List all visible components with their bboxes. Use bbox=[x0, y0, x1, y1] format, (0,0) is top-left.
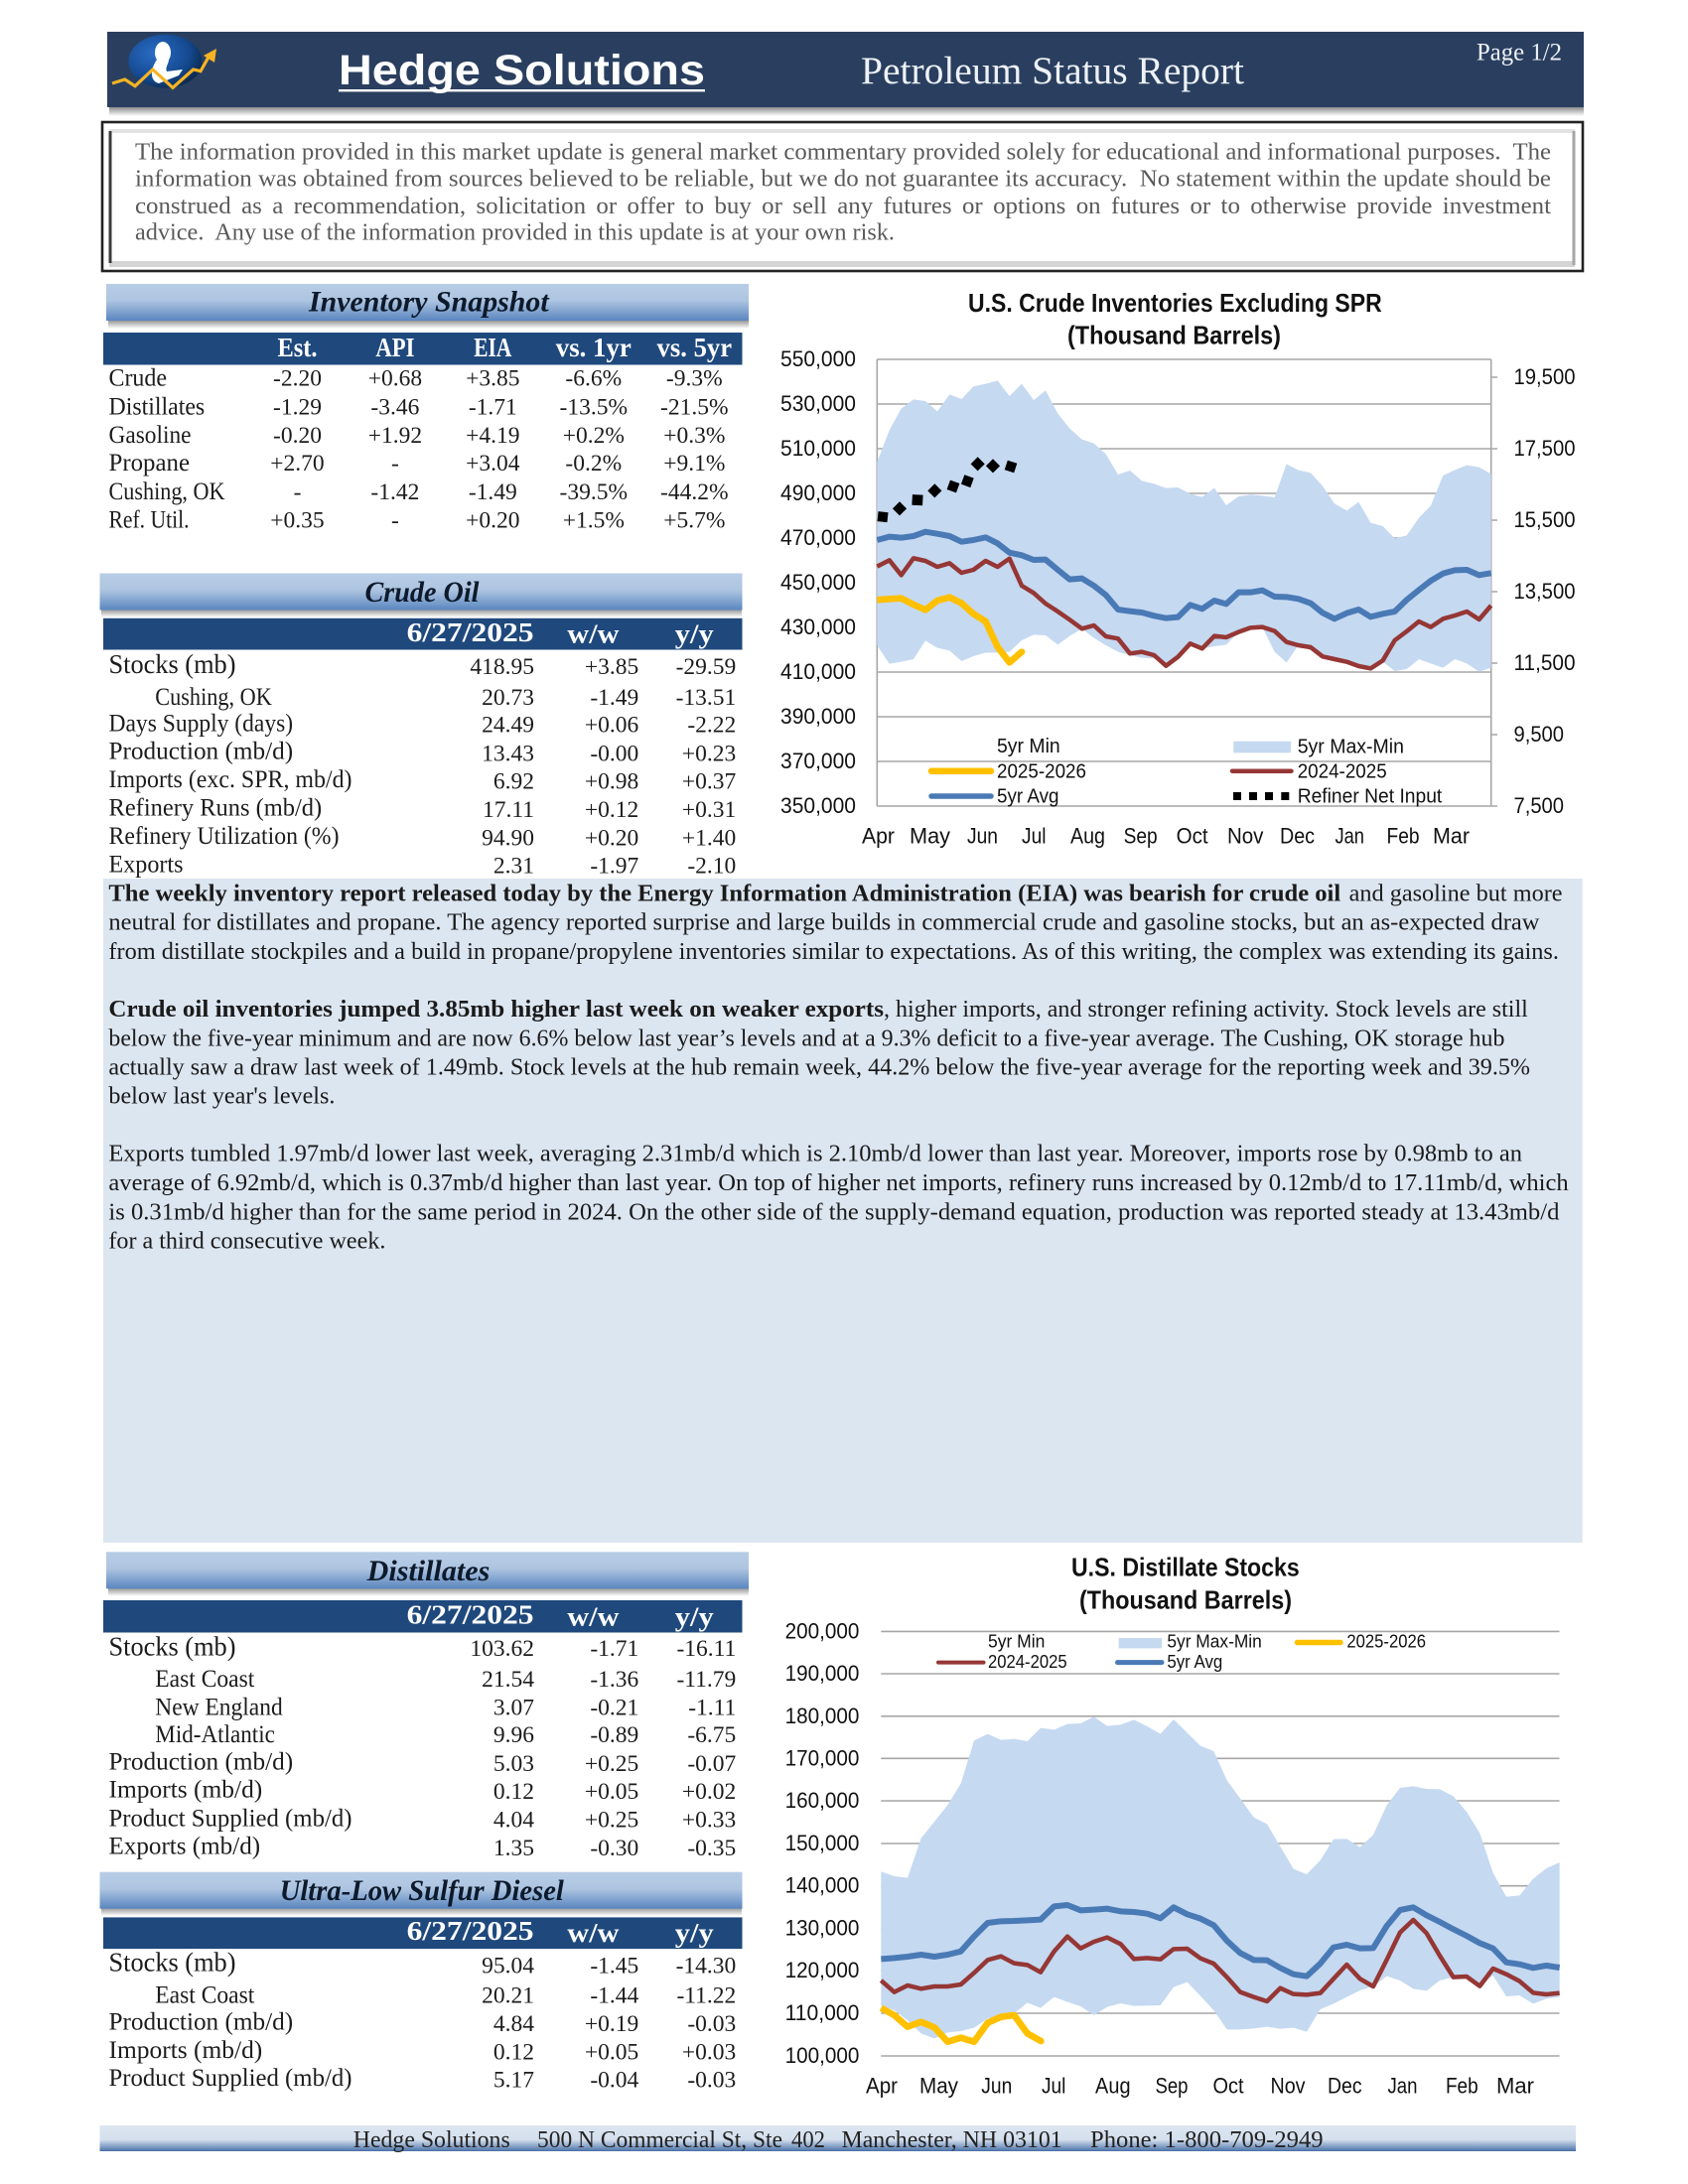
commentary paragraph 3: average of 6.92mb/d, which is 0.37mb/d higher than last year. On top of higher net imports, refinery runs increased by 0.12mb/d to 17.11mb/d, which bbox=[108, 1170, 1569, 1196]
data series bbox=[877, 380, 1491, 672]
table rows: Mid-Atlantic bbox=[155, 1721, 275, 1748]
chart legend: 2025-2026 bbox=[1346, 1632, 1426, 1652]
table rows: -1.44 bbox=[590, 1983, 639, 2009]
month labels: Feb bbox=[1386, 824, 1420, 848]
table rows: - bbox=[391, 451, 399, 477]
footer contact text: Phone: 1-800-709-2949 bbox=[1090, 2127, 1324, 2153]
y axis labels: 130,000 bbox=[785, 1915, 859, 1940]
table rows: 20.21 bbox=[482, 1983, 534, 2009]
table rows: -2.22 bbox=[687, 713, 736, 739]
y axis labels: 200,000 bbox=[785, 1618, 859, 1643]
table rows: +0.3% bbox=[663, 423, 725, 449]
table rows: +1.40 bbox=[682, 825, 736, 851]
footer bar bbox=[99, 2125, 1576, 2153]
heading: Inventory Snapshot: Inventory Snapshot bbox=[308, 286, 550, 319]
table rows: -0.07 bbox=[687, 1751, 737, 1777]
left axis labels: 530,000 bbox=[780, 391, 856, 416]
table rows: 94.90 bbox=[482, 825, 534, 851]
table rows: +0.06 bbox=[585, 713, 639, 739]
table rows: +2.70 bbox=[270, 451, 325, 477]
table rows: +0.20 bbox=[466, 508, 519, 534]
table rows bbox=[109, 365, 729, 534]
month labels: May bbox=[910, 824, 950, 848]
y axis labels: 170,000 bbox=[785, 1745, 859, 1770]
left axis labels: 490,000 bbox=[780, 480, 856, 505]
table rows: -1.71 bbox=[590, 1636, 638, 1662]
table rows: Product Supplied (mb/d) bbox=[109, 1806, 352, 1833]
table rows: +0.05 bbox=[585, 1779, 638, 1805]
chart legend: 5yr Max-Min bbox=[1167, 1632, 1262, 1652]
table rows: 0.12 bbox=[493, 2039, 534, 2065]
table rows: -29.59 bbox=[676, 654, 736, 680]
table rows: +1.92 bbox=[368, 423, 422, 449]
right axis labels bbox=[1513, 364, 1575, 818]
month labels: Apr bbox=[866, 2073, 898, 2099]
month labels: Jun bbox=[981, 2073, 1012, 2099]
month labels: Nov bbox=[1271, 2073, 1305, 2099]
month labels: Apr bbox=[862, 824, 895, 848]
table rows: +0.35 bbox=[270, 508, 325, 534]
panel: inventory snapshot bbox=[103, 284, 749, 534]
month labels: Aug bbox=[1070, 824, 1105, 848]
table rows bbox=[109, 649, 737, 879]
month labels: Dec bbox=[1328, 2073, 1362, 2099]
chart legend: 2025-2026 bbox=[997, 760, 1086, 782]
table header row bbox=[103, 1600, 743, 1632]
month labels: Feb bbox=[1446, 2073, 1478, 2099]
2024-2025 line bbox=[881, 1920, 1560, 2001]
chart legend: 5yr Avg bbox=[997, 785, 1058, 807]
table rows: +0.31 bbox=[682, 797, 736, 823]
table rows: 21.54 bbox=[482, 1667, 534, 1693]
table rows: +0.03 bbox=[682, 2039, 736, 2065]
table rows: -2.10 bbox=[687, 853, 736, 879]
heading: Distillates: Distillates bbox=[366, 1555, 490, 1587]
left axis labels: 370,000 bbox=[780, 749, 856, 773]
table rows: -0.21 bbox=[590, 1695, 638, 1720]
chart legend: 2024-2025 bbox=[988, 1652, 1067, 1672]
right axis labels: 17,500 bbox=[1513, 436, 1575, 461]
table rows: -1.97 bbox=[590, 853, 639, 879]
month labels: Dec bbox=[1280, 824, 1315, 848]
table rows: -0.2% bbox=[565, 451, 622, 477]
month labels bbox=[866, 2073, 1534, 2099]
table rows: +0.37 bbox=[682, 768, 737, 794]
heading: Ultra-Low Sulfur Diesel: Ultra-Low Sulfur Diesel bbox=[280, 1874, 565, 1907]
month labels: Sep bbox=[1156, 2073, 1188, 2099]
disclaimer text bbox=[135, 140, 1551, 246]
left axis labels: 550,000 bbox=[780, 346, 856, 371]
disclaimer text: information was obtained from sources believed to be reliable, but we do not guarantee its accuracy. No statement within the update should be bbox=[135, 167, 1551, 193]
y axis labels: 140,000 bbox=[785, 1873, 859, 1898]
right axis labels: 13,500 bbox=[1513, 579, 1575, 604]
5yr average line bbox=[877, 532, 1491, 618]
table rows: -21.5% bbox=[660, 395, 729, 421]
table header row: API bbox=[375, 333, 414, 362]
month labels: Jan bbox=[1335, 824, 1364, 848]
table header row: vs. 5yr bbox=[657, 333, 732, 362]
table rows: Stocks (mb) bbox=[109, 1948, 236, 1978]
table rows: +5.7% bbox=[663, 508, 725, 534]
month labels: Oct bbox=[1213, 2073, 1243, 2099]
table rows: Refinery Runs (mb/d) bbox=[109, 795, 322, 822]
table rows: - bbox=[391, 508, 399, 534]
table rows: -6.75 bbox=[687, 1722, 736, 1748]
table rows: Imports (mb/d) bbox=[109, 2037, 262, 2064]
chart: U.S. distillate stocks bbox=[785, 1553, 1560, 2099]
table rows: East Coast bbox=[155, 1982, 254, 2009]
table rows: +0.68 bbox=[368, 366, 422, 392]
table rows: Stocks (mb) bbox=[109, 1631, 236, 1661]
table rows: Crude bbox=[109, 365, 167, 392]
heading: Crude Oil bbox=[99, 574, 743, 617]
table rows: -13.5% bbox=[560, 395, 628, 421]
footer contact text: Hedge Solutions bbox=[353, 2127, 510, 2153]
chart legend: 2024-2025 bbox=[1298, 760, 1387, 782]
right axis labels: 9,500 bbox=[1513, 722, 1564, 747]
5yr max-min band bbox=[877, 380, 1491, 672]
table rows: Distillates bbox=[109, 394, 205, 421]
month labels: Jan bbox=[1388, 2073, 1418, 2099]
commentary paragraph 3: is 0.31mb/d higher than for the same period in 2024. On the other side of the supply-demand equation, production was reported steady at 13.43mb/d bbox=[108, 1199, 1559, 1225]
table rows: -0.00 bbox=[590, 741, 638, 766]
table rows bbox=[109, 1631, 737, 1861]
table rows: +0.19 bbox=[585, 2011, 638, 2037]
chart: U.S. crude inventories excluding SPR bbox=[780, 288, 1575, 848]
table rows: 24.49 bbox=[482, 713, 534, 739]
month labels: Jul bbox=[1022, 824, 1047, 848]
month labels: Jun bbox=[967, 824, 998, 848]
table rows: +3.85 bbox=[585, 654, 638, 680]
table header row bbox=[103, 1916, 743, 1949]
table rows: -1.11 bbox=[688, 1695, 736, 1720]
table rows: -0.03 bbox=[687, 2011, 736, 2037]
table rows: +9.1% bbox=[663, 451, 725, 477]
y axis labels: 190,000 bbox=[785, 1661, 859, 1686]
chart legend bbox=[938, 1632, 1426, 1672]
table rows: +0.20 bbox=[585, 825, 638, 851]
table header row: 6/27/2025 bbox=[407, 617, 534, 647]
table rows bbox=[109, 1948, 736, 2093]
commentary paragraph 1: neutral for distillates and propane. The agency reported surprise and large builds in commercial crude and gasoline stocks, but an as-expected draw bbox=[108, 910, 1540, 936]
left axis labels: 510,000 bbox=[780, 436, 856, 461]
table header row: w/w bbox=[567, 619, 620, 649]
table rows: -1.29 bbox=[273, 395, 322, 421]
month labels: Mar bbox=[1433, 824, 1470, 848]
footer contact text: 402 bbox=[791, 2127, 825, 2153]
table rows: Gasoline bbox=[109, 422, 191, 449]
table rows: 103.62 bbox=[470, 1636, 534, 1662]
panel: distillates bbox=[103, 1552, 749, 1861]
table header row: w/w bbox=[567, 1918, 620, 1948]
chart legend: 5yr Min bbox=[988, 1632, 1045, 1652]
table rows: Cushing, OK bbox=[109, 478, 224, 505]
left axis labels: 390,000 bbox=[780, 704, 856, 729]
table rows: -16.11 bbox=[676, 1636, 736, 1662]
y axis labels: 100,000 bbox=[785, 2043, 859, 2068]
left axis labels bbox=[780, 346, 856, 818]
table header row: Est. bbox=[278, 333, 318, 362]
right axis labels: 7,500 bbox=[1513, 793, 1564, 818]
footer contact text: 500 N Commercial St, Ste bbox=[537, 2127, 782, 2153]
table rows: +0.05 bbox=[585, 2039, 638, 2065]
table rows: -11.22 bbox=[676, 1983, 736, 2009]
panel: crude oil bbox=[99, 574, 743, 879]
table rows: +0.33 bbox=[682, 1807, 736, 1833]
table rows: -1.36 bbox=[590, 1667, 639, 1693]
page number: Page 1/2 bbox=[1477, 40, 1562, 66]
table rows: +3.85 bbox=[466, 366, 519, 392]
disclaimer text: The information provided in this market update is general market commentary provided solely for educational and informational purposes. The bbox=[135, 140, 1551, 166]
table rows: -1.49 bbox=[469, 479, 517, 505]
table rows: +0.98 bbox=[585, 768, 638, 794]
table rows: -6.6% bbox=[565, 366, 622, 392]
table rows: Imports (mb/d) bbox=[109, 1777, 262, 1804]
2024-2025 line bbox=[877, 558, 1491, 668]
5yr max-min band bbox=[881, 1716, 1560, 2038]
table rows: +0.23 bbox=[682, 741, 736, 766]
5yr average line bbox=[881, 1905, 1560, 1977]
table rows: +4.19 bbox=[466, 423, 519, 449]
table header row: vs. 1yr bbox=[556, 333, 632, 362]
commentary paragraph 1 bbox=[108, 881, 1563, 965]
table rows: Ref. Util. bbox=[109, 506, 189, 534]
chart legend: 5yr Min bbox=[997, 736, 1060, 757]
table header row: 6/27/2025 bbox=[407, 1916, 534, 1946]
table rows: -2.20 bbox=[273, 366, 322, 392]
chart legend: Refiner Net Input bbox=[1298, 785, 1443, 807]
table rows: -9.3% bbox=[666, 366, 723, 392]
table rows: East Coast bbox=[155, 1666, 254, 1693]
table rows: 17.11 bbox=[483, 797, 534, 823]
table rows: +0.25 bbox=[585, 1807, 638, 1833]
left axis labels: 470,000 bbox=[780, 525, 856, 550]
commentary panel bbox=[103, 879, 1583, 1543]
footer contact text bbox=[353, 2127, 1324, 2153]
subtitle: Petroleum Status Report: Petroleum Status Report bbox=[861, 50, 1244, 92]
table rows: 95.04 bbox=[482, 1953, 534, 1979]
title: Hedge Solutions: Hedge Solutions bbox=[339, 47, 705, 94]
gridlines bbox=[881, 1631, 1559, 2056]
heading: Distillates bbox=[106, 1552, 749, 1596]
plot frame and gridlines bbox=[877, 359, 1497, 806]
commentary paragraph 1: from distillate stockpiles and a build in propane/propylene inventories similar to expectations. As of this writing, the complex was extending its gains. bbox=[108, 939, 1559, 965]
month labels: Aug bbox=[1095, 2073, 1131, 2099]
table rows: Exports (mb/d) bbox=[109, 1833, 260, 1859]
chart title: (Thousand Barrels) bbox=[1067, 320, 1281, 349]
chart title bbox=[968, 288, 1382, 349]
right axis labels: 15,500 bbox=[1513, 507, 1575, 532]
commentary paragraph 2: actually saw a draw last week of 1.49mb. Stock levels at the hub remain week, 44.2% below the five-year average for the reporting week and 39.5% bbox=[108, 1054, 1530, 1080]
table rows: 3.07 bbox=[493, 1695, 534, 1720]
table rows: +0.25 bbox=[585, 1751, 638, 1777]
month labels: Nov bbox=[1227, 824, 1263, 848]
page header banner bbox=[107, 32, 1584, 116]
table rows: +3.04 bbox=[466, 451, 520, 477]
table rows: -11.79 bbox=[676, 1667, 736, 1693]
table rows: Product Supplied (mb/d) bbox=[109, 2065, 352, 2092]
panel: ultra-low sulfur diesel bbox=[99, 1872, 743, 2093]
table rows: +0.2% bbox=[563, 423, 625, 449]
table rows: +0.12 bbox=[585, 797, 638, 823]
chart legend: 5yr Max-Min bbox=[1298, 736, 1404, 757]
table rows: -39.5% bbox=[560, 479, 628, 505]
table rows: - bbox=[294, 479, 301, 505]
month labels: Oct bbox=[1177, 824, 1208, 848]
table rows: Days Supply (days) bbox=[109, 711, 293, 738]
commentary paragraph 1: The weekly inventory report released today by the Energy Information Administration (EIA) was bearish for crude oil bbox=[108, 881, 1341, 906]
2025-2026 line bbox=[877, 598, 1025, 662]
table rows: -3.46 bbox=[370, 395, 420, 421]
table rows: -0.30 bbox=[590, 1836, 638, 1861]
table rows: 4.84 bbox=[493, 2011, 534, 2037]
table rows: 9.96 bbox=[493, 1722, 534, 1748]
table rows: -13.51 bbox=[676, 685, 736, 711]
table header row: 6/27/2025 bbox=[407, 1600, 534, 1630]
table rows: -44.2% bbox=[660, 479, 729, 505]
y axis labels: 160,000 bbox=[785, 1788, 859, 1813]
table rows: Production (mb/d) bbox=[109, 738, 293, 764]
table rows: -1.49 bbox=[590, 685, 638, 711]
left axis labels: 410,000 bbox=[780, 659, 856, 684]
2025-2026 line bbox=[881, 2008, 1045, 2044]
commentary paragraph 3 bbox=[108, 1141, 1569, 1254]
y axis labels: 110,000 bbox=[785, 2000, 859, 2025]
left axis labels: 350,000 bbox=[780, 793, 856, 818]
table header row bbox=[103, 617, 743, 649]
table header row: y/y bbox=[675, 1602, 714, 1632]
month labels: Sep bbox=[1124, 824, 1158, 848]
table rows: Imports (exc. SPR, mb/d) bbox=[109, 766, 352, 793]
table rows: Exports bbox=[109, 851, 183, 878]
month labels: Mar bbox=[1496, 2073, 1534, 2099]
footer contact text: Manchester, NH 03101 bbox=[842, 2127, 1062, 2153]
chart legend: 5yr Avg bbox=[1167, 1652, 1222, 1672]
commentary paragraph 3: Exports tumbled 1.97mb/d lower last week, averaging 2.31mb/d which is 2.10mb/d lower than last year. Moreover, imports rose by 0.98mb to an bbox=[108, 1141, 1522, 1166]
table rows: Propane bbox=[109, 450, 190, 477]
table rows: Cushing, OK bbox=[155, 684, 272, 711]
table rows: 4.04 bbox=[493, 1807, 534, 1833]
chart title: U.S. Crude Inventories Excluding SPR bbox=[968, 288, 1382, 318]
left axis labels: 450,000 bbox=[780, 570, 856, 595]
table rows: -1.42 bbox=[370, 479, 419, 505]
table rows: -0.04 bbox=[590, 2067, 639, 2093]
data series bbox=[881, 1716, 1560, 2044]
chart title bbox=[1071, 1553, 1300, 1614]
table rows: 13.43 bbox=[482, 741, 534, 766]
table rows: -14.30 bbox=[676, 1953, 736, 1979]
table rows: 20.73 bbox=[482, 685, 534, 711]
commentary paragraph 1: and gasoline but more bbox=[1349, 881, 1563, 906]
table rows: -1.45 bbox=[590, 1953, 638, 1979]
chart title: U.S. Distillate Stocks bbox=[1071, 1553, 1300, 1582]
month labels bbox=[862, 824, 1470, 848]
table rows: Stocks (mb) bbox=[109, 649, 236, 679]
disclaimer text: advice. Any use of the information provided in this update is at your own risk. bbox=[135, 220, 895, 246]
table rows: -0.03 bbox=[687, 2067, 736, 2093]
table rows: Production (mb/d) bbox=[109, 2009, 293, 2035]
commentary paragraph 2 bbox=[108, 997, 1530, 1110]
table rows: 0.12 bbox=[493, 1779, 534, 1805]
disclaimer text: construed as a recommendation, solicitation or offer to buy or sell any futures or options on futures or to otherwise provide investment bbox=[135, 194, 1551, 219]
right axis labels: 11,500 bbox=[1513, 650, 1575, 675]
table header row: y/y bbox=[675, 619, 714, 649]
commentary paragraph 2: below last year's levels. bbox=[108, 1084, 335, 1110]
disclaimer box bbox=[102, 122, 1583, 271]
table rows: -0.20 bbox=[273, 423, 322, 449]
table rows: 5.03 bbox=[493, 1751, 534, 1777]
table rows: -1.71 bbox=[469, 395, 517, 421]
icon: Hedge Solutions logo bbox=[112, 35, 216, 88]
table rows: +0.02 bbox=[682, 1779, 736, 1805]
table rows: 418.95 bbox=[470, 654, 534, 680]
refiner net input markers bbox=[878, 457, 1017, 522]
table header row: w/w bbox=[567, 1602, 620, 1632]
table rows: 6.92 bbox=[493, 768, 534, 794]
table rows: -0.89 bbox=[590, 1722, 638, 1748]
commentary paragraph 2: below the five-year minimum and are now 6.6% below last year’s levels and at a 9.3% deficit to a five-year average. The Cushing, OK storage hub bbox=[108, 1025, 1504, 1051]
commentary paragraph 2: , higher imports, and stronger refining activity. Stock levels are still bbox=[884, 997, 1528, 1023]
commentary paragraph 2: Crude oil inventories jumped 3.85mb higher last week on weaker exports bbox=[108, 997, 884, 1023]
commentary paragraph 3: for a third consecutive week. bbox=[108, 1228, 385, 1254]
y axis labels bbox=[785, 1618, 859, 2068]
table header row bbox=[103, 333, 743, 365]
table rows: -0.35 bbox=[687, 1836, 736, 1861]
y axis labels: 180,000 bbox=[785, 1704, 859, 1728]
heading: Crude Oil: Crude Oil bbox=[365, 576, 480, 609]
month labels: May bbox=[919, 2073, 958, 2099]
y axis labels: 120,000 bbox=[785, 1958, 859, 1982]
table header row: y/y bbox=[675, 1918, 714, 1948]
table rows: Production (mb/d) bbox=[109, 1748, 293, 1775]
month labels: Jul bbox=[1042, 2073, 1065, 2099]
table rows: +1.5% bbox=[563, 508, 625, 534]
table rows: Refinery Utilization (%) bbox=[109, 823, 340, 850]
table rows: 5.17 bbox=[493, 2067, 534, 2093]
table header row: EIA bbox=[474, 333, 512, 362]
table rows: 2.31 bbox=[493, 853, 534, 879]
chart title: (Thousand Barrels) bbox=[1079, 1584, 1292, 1614]
heading: Inventory Snapshot bbox=[106, 284, 749, 329]
chart legend bbox=[931, 736, 1443, 807]
table rows: New England bbox=[155, 1694, 283, 1720]
y axis labels: 150,000 bbox=[785, 1831, 859, 1855]
heading: Ultra-Low Sulfur Diesel bbox=[99, 1872, 743, 1916]
table rows: 1.35 bbox=[493, 1836, 534, 1861]
left axis labels: 430,000 bbox=[780, 614, 856, 639]
right axis labels: 19,500 bbox=[1513, 364, 1575, 389]
